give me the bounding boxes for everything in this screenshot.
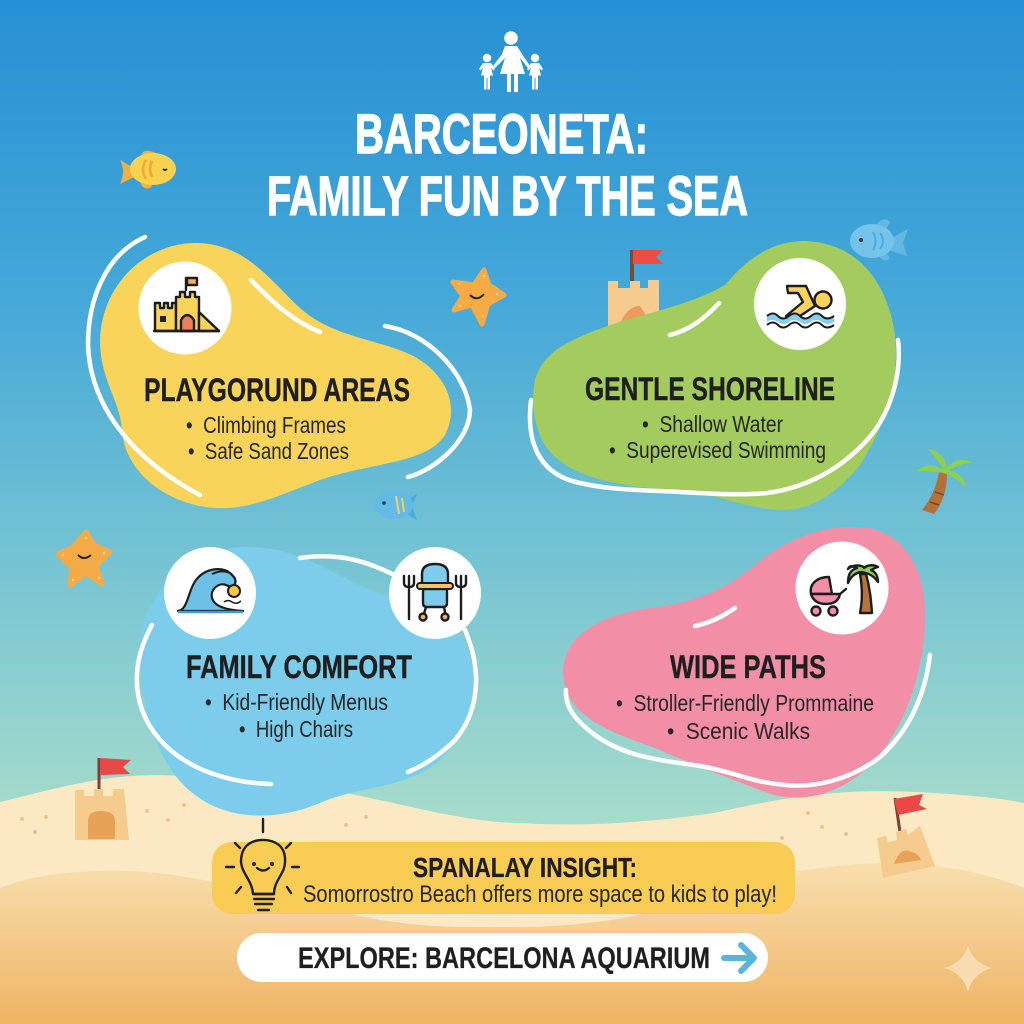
bullet list <box>205 689 388 742</box>
title: BARCEONETA: <box>355 102 648 165</box>
white accent strokes <box>566 608 930 786</box>
panel: gentle shoreline <box>530 241 899 510</box>
callout: insight <box>212 819 795 914</box>
blue blob <box>140 547 473 816</box>
bullet list: • Safe Sand Zones <box>188 438 349 464</box>
icon: starfish left <box>58 532 110 585</box>
bullet list: • Scenic Walks <box>667 718 810 744</box>
bullet list: • Kid-Friendly Menus <box>205 689 388 715</box>
bullet list: • Shallow Water <box>642 411 783 437</box>
icon: stroller and palm <box>796 542 888 634</box>
bullet list: • Superevised Swimming <box>609 437 826 463</box>
beach sand <box>0 775 1024 1024</box>
panel: wide paths <box>563 527 930 798</box>
decorative sparkle <box>944 945 992 992</box>
title: FAMILY FUN BY THE SEA <box>267 164 748 227</box>
title <box>267 102 748 227</box>
white accent strokes <box>88 237 470 495</box>
heading: GENTLE SHORELINE <box>585 371 835 407</box>
panel: playground areas <box>88 237 470 508</box>
white accent strokes <box>530 303 899 494</box>
panel: family comfort <box>137 547 481 816</box>
arrow <box>724 945 754 971</box>
bullet list: • High Chairs <box>239 716 353 742</box>
heading: WIDE PATHS <box>670 649 826 685</box>
icon: sandcastle <box>138 262 232 354</box>
icon: palm tree <box>917 449 973 514</box>
bullet list <box>609 411 826 463</box>
sand dots <box>20 803 848 840</box>
icon: swimmer <box>754 258 846 350</box>
heading: FAMILY COMFORT <box>186 649 412 685</box>
icon: family <box>479 31 543 92</box>
icon: yellow fish <box>120 151 176 188</box>
bullet list: • Stroller-Friendly Prommaine <box>616 690 874 716</box>
icon: lightbulb <box>226 819 299 910</box>
bullet list <box>616 690 874 744</box>
pink blob <box>563 527 925 798</box>
button: explore: EXPLORE: BARCELONA AQUARIUM <box>298 942 710 975</box>
insight banner <box>212 842 795 914</box>
bullet list: • Climbing Frames <box>186 412 346 438</box>
insight text: Somorrostro Beach offers more space to kids to play! <box>303 881 777 908</box>
icon: small blue fish <box>375 491 417 520</box>
yellow blob <box>100 243 451 508</box>
icon: blue fish <box>850 219 908 260</box>
heading: PLAYGORUND AREAS <box>144 372 410 408</box>
insight heading: SPANALAY INSIGHT: <box>413 852 637 883</box>
icon: right sandcastle with flag <box>877 794 935 878</box>
white accent strokes <box>137 556 476 784</box>
green blob <box>533 241 896 510</box>
icon: back sandcastle with flag <box>608 250 663 330</box>
icon: starfish top <box>453 270 504 324</box>
icon: high chair <box>389 547 481 639</box>
icon: left sandcastle with flag <box>75 758 131 840</box>
bullet list <box>186 412 349 464</box>
icon: wave <box>164 547 256 639</box>
button: explore <box>237 933 768 982</box>
